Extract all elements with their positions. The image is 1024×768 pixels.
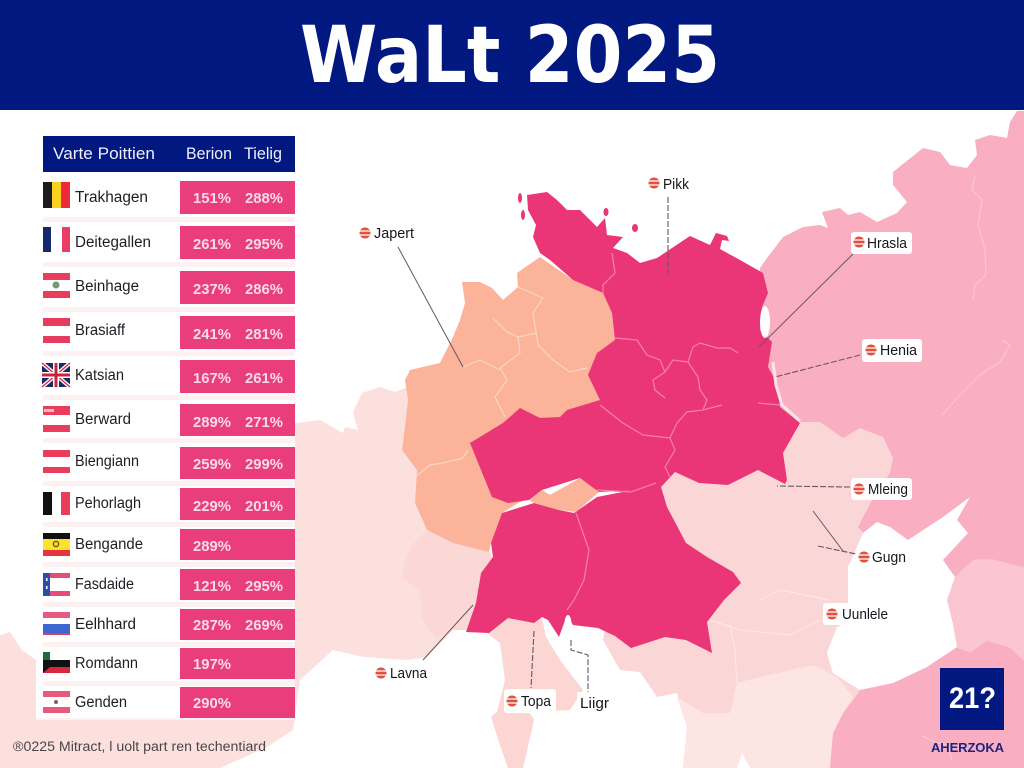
region: orange west [402, 257, 620, 552]
row: Deitegallen [43, 226, 295, 267]
row: Genden [36, 687, 295, 720]
label: Hrasla: Hrasla [867, 236, 907, 252]
row: Pehorlagh: Pehorlagh [75, 495, 141, 512]
row: Berward: Berward [75, 411, 131, 428]
row: Berward: 271% [245, 414, 283, 431]
label: Topa [504, 631, 556, 713]
logo badge: 21? [949, 682, 996, 715]
row: Genden: Genden [75, 694, 127, 711]
logo badge [931, 668, 1005, 755]
row: Genden: 290% [193, 695, 231, 712]
row: Pehorlagh: 201% [245, 498, 283, 515]
label: Topa: Topa [521, 694, 551, 710]
row: Trakhagen: 151% [193, 190, 231, 207]
row: Fasdaide: Fasdaide [75, 576, 134, 593]
row: Eelhhard: 287% [193, 617, 231, 634]
label: Gugn [813, 511, 906, 566]
label: Pikk: Pikk [663, 177, 690, 193]
row: Brasiaff: 281% [245, 326, 283, 343]
region: southern peninsula [487, 615, 583, 768]
row: Biengiann: Biengiann [75, 453, 139, 470]
data table [36, 130, 295, 720]
row: Fasdaide: 295% [245, 578, 283, 595]
row: Brasiaff: 241% [193, 326, 231, 343]
row: Beinhage: Beinhage [75, 278, 139, 295]
row: Eelhhard: Eelhhard [75, 616, 136, 633]
label: Lavna: Lavna [390, 666, 427, 682]
label: Lavna [375, 605, 473, 682]
row: Deitegallen: Deitegallen [75, 234, 151, 251]
table header [43, 136, 295, 172]
region: dark south [466, 487, 741, 653]
row: Pehorlagh [43, 488, 295, 527]
logo badge: AHERZOKA [931, 740, 1005, 755]
table header: Berion [186, 145, 232, 163]
label: Ligr [571, 640, 610, 712]
row: Katsian [42, 360, 295, 400]
islands and lake [518, 193, 800, 768]
label: Uunlele: Uunlele [842, 607, 888, 623]
row: Bengande [43, 529, 295, 567]
row: Biengiann [43, 447, 295, 486]
row: Bengande: Bengande [75, 536, 143, 553]
row: Katsian: 167% [193, 370, 231, 387]
row: Bengande: 289% [193, 538, 231, 555]
region: dark north [470, 192, 800, 503]
label: Henia [775, 339, 922, 377]
region: western light pink [0, 387, 493, 768]
table header: Varte Poittien [53, 145, 155, 163]
row: Trakhagen: Trakhagen [75, 189, 148, 206]
row: Pehorlagh: 229% [193, 498, 231, 515]
row: Beinhage: 237% [193, 281, 231, 298]
row: Biengiann: 259% [193, 456, 231, 473]
title: WaLt 2025 [300, 11, 720, 101]
row: Trakhagen [43, 181, 295, 222]
label: Ligr: Liigr [580, 696, 609, 712]
row: Romdann: Romdann [75, 655, 138, 672]
footer note: ®0225 Mitract, l uolt part ren techentiard [13, 739, 266, 754]
label: Hrasla [759, 232, 912, 347]
label: Pikk [648, 177, 690, 273]
row: Fasdaide [43, 569, 295, 607]
label: Uunlele [823, 603, 890, 625]
row: Berward [43, 404, 295, 443]
row: Katsian: Katsian [75, 367, 124, 384]
label: Mleing: Mleing [868, 482, 908, 498]
region: central-east light pink [603, 422, 893, 768]
header banner [0, 0, 1024, 110]
region: pale south-east [677, 665, 853, 768]
orange centre patch [529, 478, 599, 512]
region: white inland lake [827, 497, 970, 690]
label: Henia: Henia [880, 343, 917, 359]
row: Romdann [43, 648, 295, 686]
row: Brasiaff [43, 316, 295, 356]
region: eastern medium pink [760, 111, 1024, 768]
row: Biengiann: 299% [245, 456, 283, 473]
row: Berward: 289% [193, 414, 231, 431]
row: Beinhage [43, 271, 295, 312]
row: Eelhhard: 269% [245, 617, 283, 634]
row: Deitegallen: 261% [193, 236, 231, 253]
label: Gugn: Gugn [872, 550, 906, 566]
row: Brasiaff: Brasiaff [75, 322, 126, 339]
row: Deitegallen: 295% [245, 236, 283, 253]
region: south-east lighter pink [947, 560, 1024, 660]
table header: Tielig [244, 145, 282, 163]
row: Eelhhard [43, 609, 295, 647]
row: Beinhage: 286% [245, 281, 283, 298]
label: Mleing [777, 478, 912, 500]
label: Japert: Japert [374, 226, 414, 242]
row: Romdann: 197% [193, 656, 231, 673]
region: south-west inner pink [402, 530, 493, 638]
row: Fasdaide: 121% [193, 578, 231, 595]
label: Japert [359, 226, 463, 367]
row: Trakhagen: 288% [245, 190, 283, 207]
row: Katsian: 261% [245, 370, 283, 387]
